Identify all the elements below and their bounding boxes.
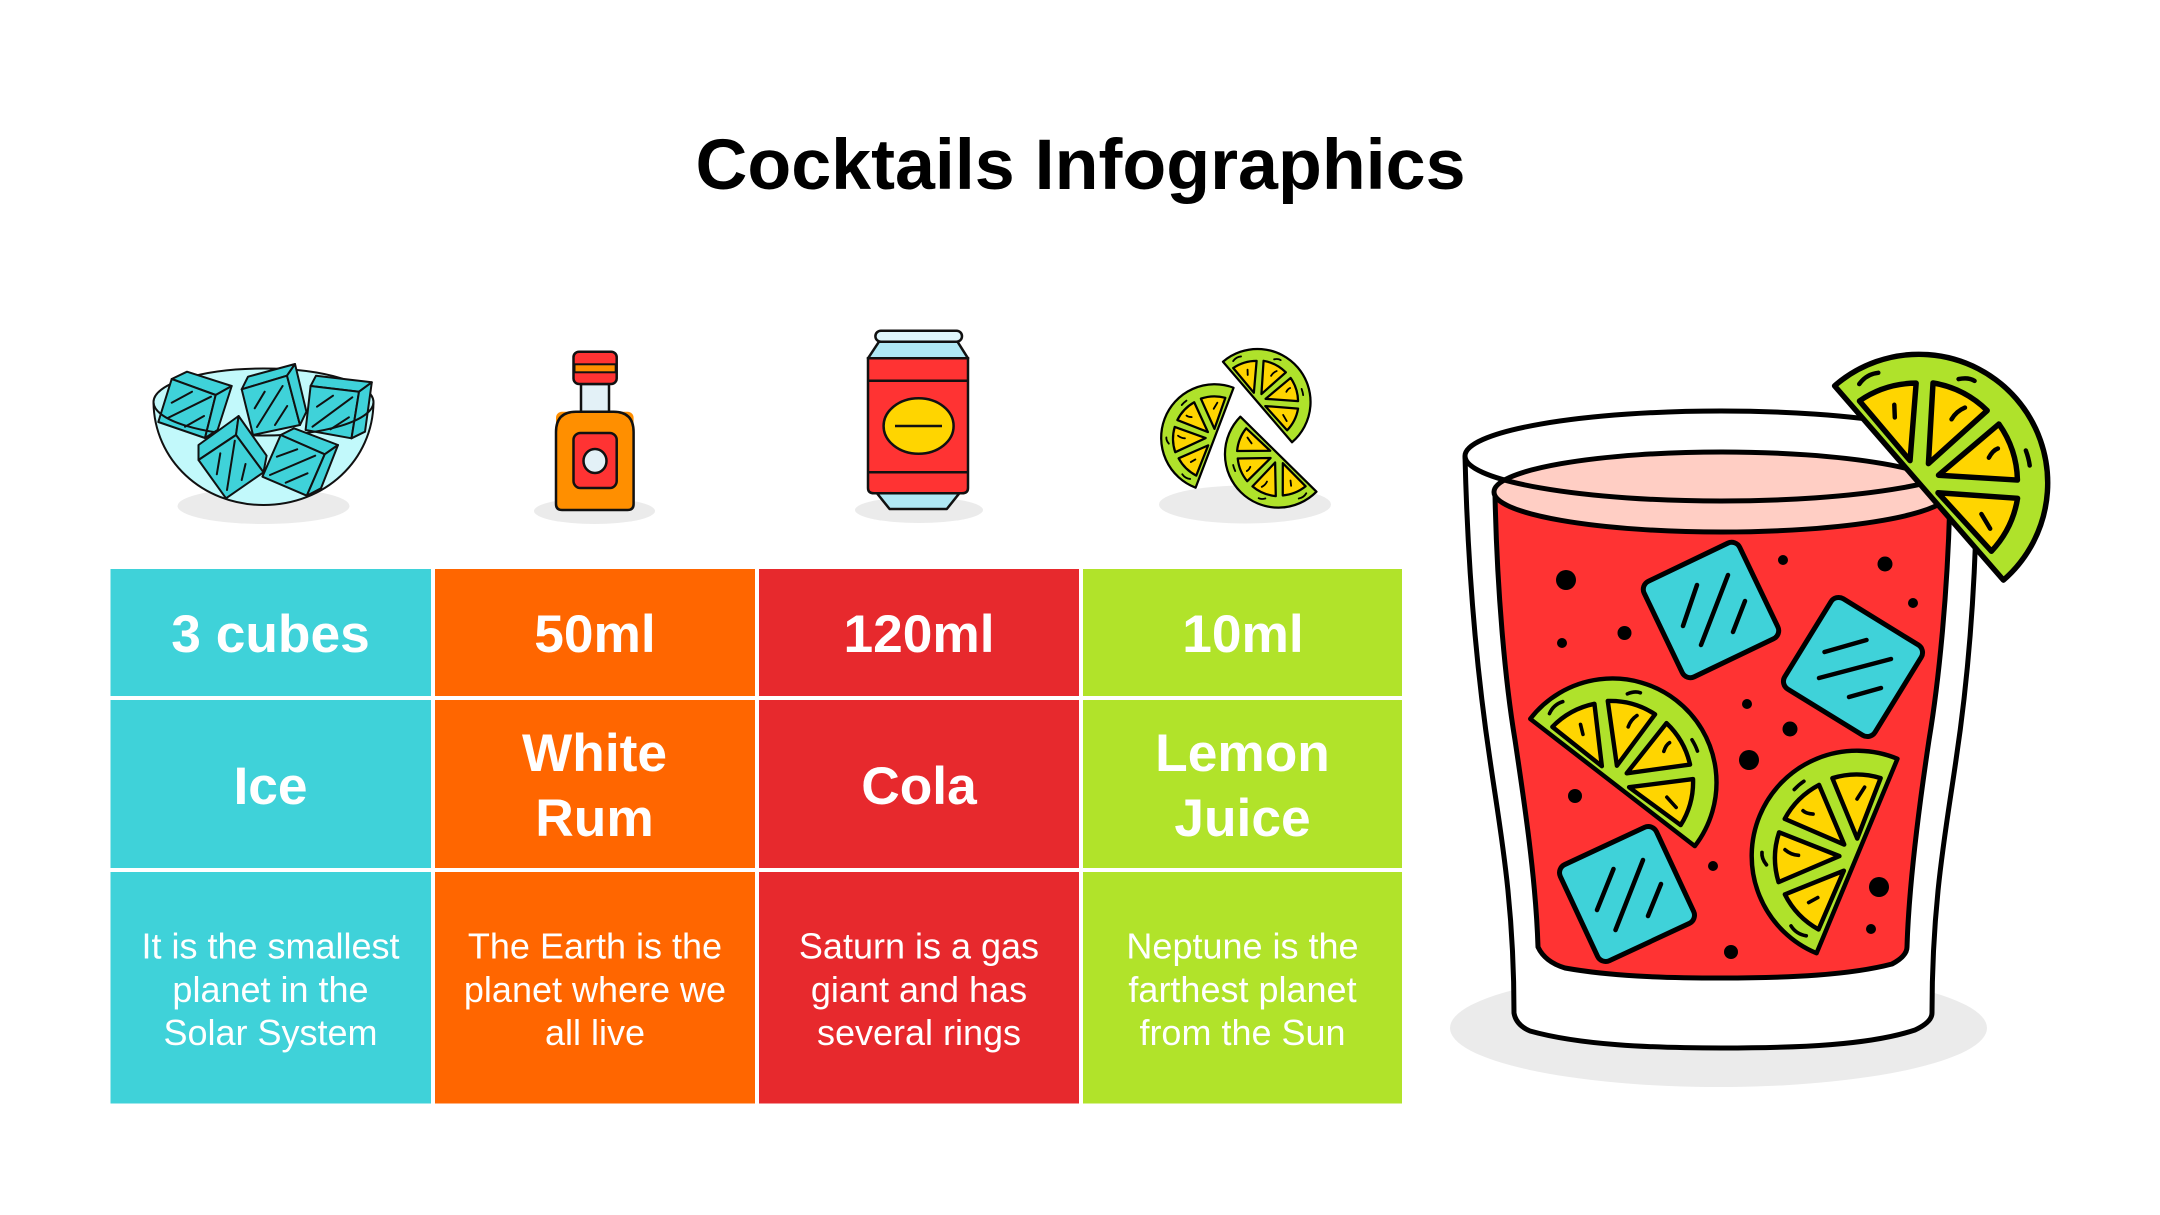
- description: lemon juice: farthest planet: [1128, 969, 1357, 1010]
- lime slice in drink, right: [1719, 718, 1897, 953]
- panel: white rum column: [435, 569, 755, 1104]
- description: cola: Saturn is a gas: [799, 926, 1039, 966]
- icon: bowl of ice cubes: [154, 364, 374, 524]
- panel: cola column: [759, 569, 1079, 1104]
- amount: 50ml: 50ml: [534, 605, 656, 664]
- description: white rum: planet where we: [464, 969, 726, 1010]
- ingredient: ice: Ice: [233, 757, 308, 816]
- lime slice in drink, left: [1530, 637, 1758, 846]
- amount: 120ml: 120ml: [843, 605, 995, 664]
- description: ice: planet in the: [172, 969, 369, 1010]
- ingredient: white rum: Rum: [535, 789, 654, 848]
- ingredient: lemon juice: Juice: [1174, 789, 1311, 848]
- ingredient: cola: Cola: [861, 757, 977, 816]
- ice cube 1: [1640, 539, 1782, 681]
- description: white rum: all live: [545, 1012, 645, 1053]
- lime garnish on rim: [1835, 301, 2101, 580]
- icon: lemon slices: [1146, 327, 1332, 530]
- amount: 3 cubes: 3 cubes: [171, 605, 370, 664]
- ice cube 3: [1557, 824, 1697, 964]
- panel: lemon juice column: [1083, 569, 1402, 1104]
- icon: cola can: [855, 331, 983, 523]
- description: ice: It is the smallest: [141, 926, 400, 966]
- description: lemon juice: Neptune is the: [1126, 926, 1359, 966]
- amount: 10ml: 10ml: [1182, 605, 1304, 664]
- title: Cocktails Infographics: [696, 125, 1466, 205]
- description: white rum: The Earth is the: [468, 926, 722, 966]
- panel: ice column: [110, 569, 431, 1104]
- illustration: cocktail glass: [1450, 301, 2101, 1087]
- ingredient: lemon juice: Lemon: [1155, 724, 1330, 783]
- description: cola: giant and has: [811, 969, 1027, 1010]
- bubbles: [1556, 555, 1918, 959]
- description: lemon juice: from the Sun: [1139, 1012, 1346, 1053]
- description: cola: several rings: [817, 1012, 1021, 1053]
- ingredient: white rum: White: [522, 724, 667, 783]
- icon: rum bottle: [534, 352, 655, 524]
- ice cube 2: [1780, 594, 1926, 740]
- description: ice: Solar System: [163, 1012, 378, 1053]
